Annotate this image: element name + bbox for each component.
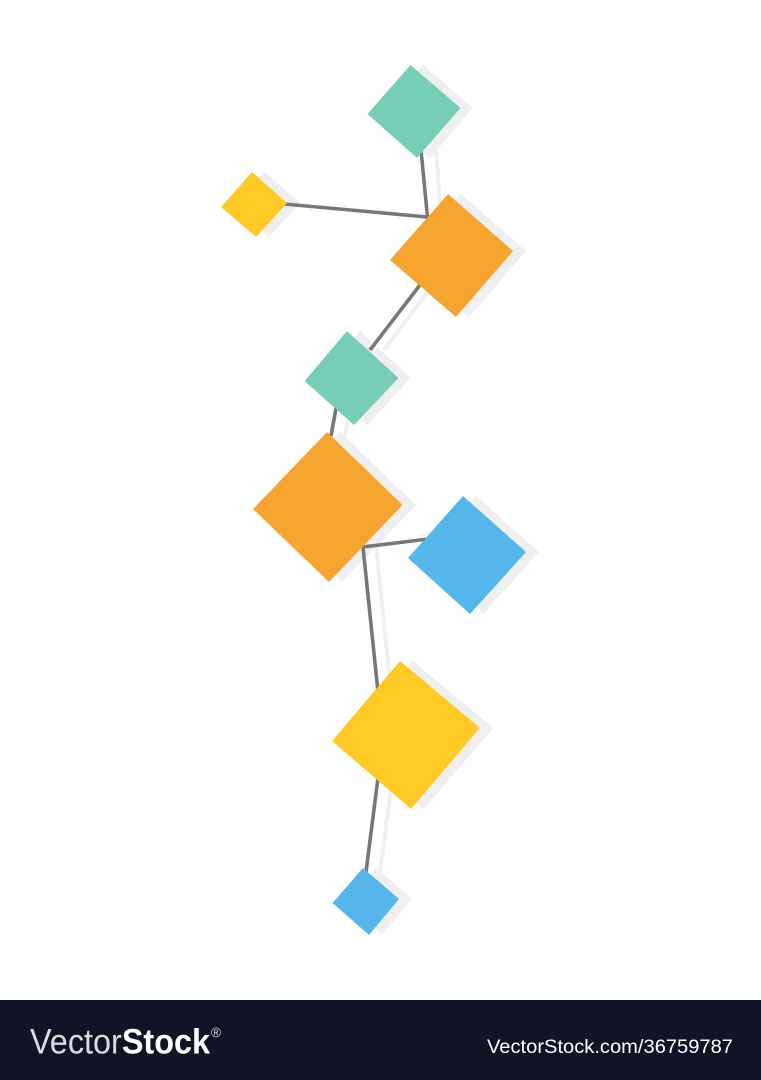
diamond: small blue — [332, 868, 399, 935]
diamond: large yellow — [332, 661, 480, 809]
connector lines — [284, 150, 428, 872]
diamond: middle teal — [304, 331, 398, 425]
diamond: upper orange — [390, 194, 513, 317]
footer image id: VectorStock.com/36759787 — [487, 1037, 733, 1058]
diamond: small yellow — [221, 172, 287, 237]
footer logo: VectorStock — [30, 1022, 210, 1062]
footer bar — [0, 1000, 761, 1080]
registered mark: ® — [211, 1025, 221, 1040]
diamond: top teal — [368, 65, 460, 158]
diamond: blue — [408, 496, 526, 614]
diamond: large orange — [253, 432, 402, 582]
